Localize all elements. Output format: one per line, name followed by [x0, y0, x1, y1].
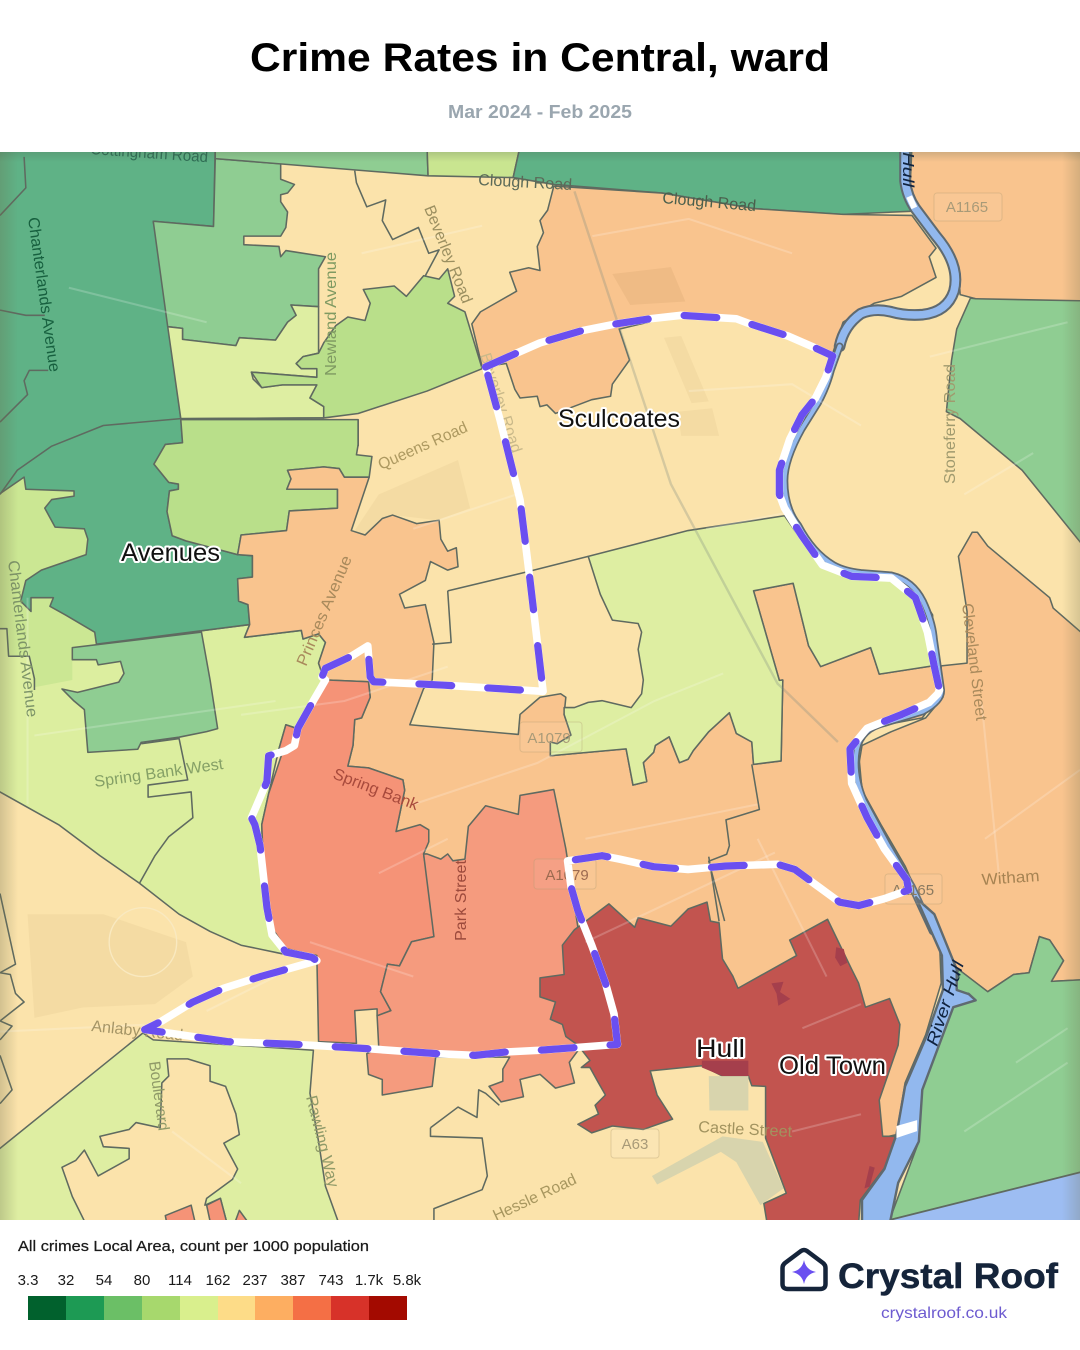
- region: pale green centre: [550, 516, 933, 785]
- shield: A1079 lower: [534, 859, 596, 889]
- title: Crime Rates in Central, ward: [250, 36, 830, 80]
- bridge: [896, 1120, 917, 1138]
- label: Park Street: Park Street: [453, 859, 470, 941]
- label: Boulevard: Boulevard: [145, 1060, 172, 1132]
- region: light green Newland: [251, 269, 482, 418]
- shield: A1165 north: [934, 193, 1002, 221]
- streets texture: [0, 219, 1080, 1183]
- label: Cottingham Road: Cottingham Road: [90, 141, 209, 166]
- region: orange north Clough: [472, 186, 936, 413]
- legend title: All crimes Local Area, count per 1000 population: [18, 1238, 369, 1255]
- legend scale labels: 1.7k: [355, 1272, 384, 1289]
- legend scale labels: 54: [96, 1272, 112, 1289]
- park patches on cream: [28, 336, 719, 1018]
- road shields: [520, 193, 1002, 1158]
- shield: A1079 lower: A1079: [545, 867, 589, 884]
- stadium park: [109, 908, 177, 977]
- darker block in orange: [612, 267, 685, 305]
- label: Newland Avenue: Newland Avenue: [323, 252, 340, 376]
- label: Cleveland Street: Cleveland Street: [958, 602, 989, 722]
- ward boundary: central: [145, 315, 939, 1055]
- dark red patches: [702, 947, 875, 1188]
- legend scale labels: 3.3: [18, 1272, 38, 1289]
- region: mid green top band: [216, 152, 428, 177]
- region: dark green Clough Road north: [513, 147, 912, 214]
- region: salmon west: [262, 680, 434, 1043]
- legend scale labels: 5.8k: [393, 1272, 422, 1289]
- label: Anlaby Road: Anlaby Road: [91, 1018, 184, 1045]
- label: Clough Road east: Clough Road: [662, 190, 757, 215]
- legend scale labels: 387: [280, 1272, 306, 1289]
- label: Chanterlands Avenue south: Chanterlands Avenue: [4, 559, 40, 718]
- wordmark: Crystal Roof: [838, 1257, 1058, 1296]
- place labels: [121, 405, 886, 1080]
- region: pale green west: [0, 626, 324, 955]
- url: crystalroof.co.uk: [881, 1305, 1008, 1322]
- river hull south section: [862, 897, 976, 1224]
- label: River Hull south: River Hull: [923, 957, 968, 1048]
- shield: A1165 south: [885, 874, 942, 904]
- place: Sculcoates: Sculcoates: [558, 405, 680, 433]
- subtitle: date range: Mar 2024 - Feb 2025: [448, 102, 632, 122]
- shield: A63: [611, 1129, 659, 1158]
- edge vignettes: [0, 152, 1080, 1220]
- region: green east: [946, 298, 1080, 548]
- railway track: [574, 191, 838, 742]
- legend scale labels: 237: [242, 1272, 268, 1289]
- shield: A1079 upper: [520, 722, 582, 752]
- label: Clough Road west: Clough Road: [478, 172, 573, 194]
- logo: Crystal Roof: [782, 1250, 1058, 1322]
- legend scale labels: [18, 1272, 422, 1289]
- shield: A1165 north: A1165: [946, 199, 988, 216]
- river hull north section: [785, 147, 955, 931]
- label: Beverley Road south: Beverley Road: [476, 351, 525, 455]
- label: Hessle Road: Hessle Road: [491, 1171, 579, 1225]
- region: lime green far west: [0, 477, 96, 687]
- region: orange central: [238, 467, 943, 1138]
- place: Old Town: Old Town: [779, 1052, 886, 1080]
- pale green south-west: [0, 1033, 339, 1224]
- label: Queens Road: Queens Road: [376, 419, 470, 474]
- legend scale labels: 80: [134, 1272, 150, 1289]
- region: mid green north: [153, 159, 325, 346]
- grey car park block: [709, 1076, 748, 1111]
- region: pale band: [168, 305, 324, 419]
- region: salmon Park Street: [367, 790, 585, 1102]
- region: pale green top: [426, 152, 518, 178]
- label: Witham: Witham: [981, 868, 1040, 889]
- region: orange Cleveland: [859, 532, 1080, 992]
- label: Spring Bank: Spring Bank: [331, 766, 422, 814]
- shield: A1079 upper: A1079: [527, 730, 571, 747]
- region: orange north-east: [910, 147, 1080, 302]
- sea: [892, 1172, 1080, 1220]
- region: green south-east: [890, 937, 1080, 1220]
- legend scale labels: 162: [205, 1272, 231, 1289]
- shield: A1165 south: A1165: [892, 882, 934, 899]
- label: Stoneferry Road: Stoneferry Road: [942, 364, 959, 484]
- region: dark green north Avenues: [0, 147, 252, 644]
- label: Spring Bank West: Spring Bank West: [93, 756, 225, 791]
- label: River Hull north: Hull: [899, 152, 916, 188]
- salmon fragments south: [164, 1198, 248, 1220]
- label: Rawling Way: Rawling Way: [302, 1094, 341, 1189]
- label: Princes Avenue: Princes Avenue: [294, 553, 356, 669]
- region: mid green south Avenues: [62, 632, 218, 752]
- north bridge: [909, 196, 914, 208]
- label: Castle Street: Castle Street: [698, 1119, 793, 1141]
- cream island south-west: [62, 1059, 239, 1224]
- region: light green Queens: [154, 420, 372, 555]
- legend scale labels: 114: [168, 1272, 192, 1289]
- label: Beverley Road north: Beverley Road: [420, 203, 475, 306]
- shield: A63: A63: [622, 1136, 648, 1153]
- label: Chanterlands Avenue north: Chanterlands Avenue: [24, 216, 63, 373]
- internal boundaries: [0, 157, 759, 1220]
- legend scale labels: 743: [318, 1272, 344, 1289]
- region: red city centre and Old Town: [540, 902, 900, 1224]
- map road labels: [4, 141, 1040, 1225]
- place: Hull: Hull: [696, 1035, 745, 1063]
- marina: [652, 1136, 783, 1205]
- icon: house with star: [782, 1250, 826, 1289]
- legend: [18, 1238, 422, 1320]
- legend colour bar: [28, 1296, 407, 1320]
- place: Avenues: Avenues: [121, 539, 220, 567]
- legend scale labels: 32: [58, 1272, 74, 1289]
